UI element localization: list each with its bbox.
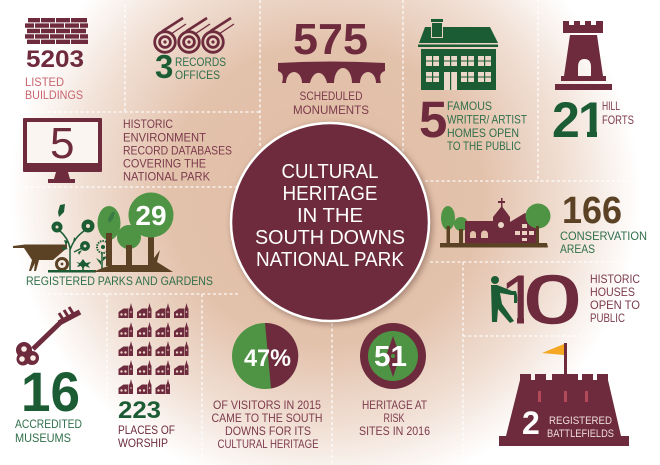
number: 16: 16: [21, 360, 80, 423]
label: historic houses: PUBLIC: [590, 311, 625, 325]
label: databases: ENVIRONMENT: [123, 130, 207, 144]
label: heritage at risk: RISK: [384, 411, 404, 425]
label: databases: COVERING THE: [123, 156, 206, 170]
icon: churches grid: [118, 303, 188, 394]
number: 10: 1: [500, 260, 539, 338]
label: homes: HOMES OPEN: [447, 126, 519, 140]
label: listed buildings: [25, 75, 83, 102]
label: visitors: [212, 398, 322, 451]
label: registered battlefields: BATTLEFIELDS: [547, 428, 614, 440]
number: 3: 3: [155, 48, 173, 85]
label: places of worship: PLACES OF: [118, 423, 175, 437]
label: places of worship: WORSHIP: [118, 436, 168, 450]
panel: records offices: [155, 18, 234, 85]
label: homes: WRITER/ ARTIST: [447, 112, 528, 126]
number: 21: 1: [578, 92, 606, 148]
label: conservation areas: CONSERVATION: [560, 229, 647, 243]
label: historic houses: OPEN TO: [590, 298, 640, 312]
icon: house: [418, 19, 498, 90]
label: historic houses: HISTORIC: [590, 272, 640, 286]
label: scheduled monuments: SCHEDULED: [300, 89, 363, 103]
label: places of worship: [118, 423, 175, 450]
title: IN THE: [297, 204, 363, 227]
label: scheduled monuments: MONUMENTS: [293, 103, 369, 117]
label: registered parks and gardens: REGISTERED PARKS AND GARDENS: [26, 274, 213, 288]
label: heritage at risk: [359, 398, 430, 438]
label: conservation areas: [560, 229, 647, 256]
icon: flowers: [48, 204, 109, 272]
label: listed buildings: LISTED: [25, 75, 64, 89]
number: 223: 223: [118, 397, 161, 424]
panel: record databases: [23, 117, 232, 184]
icon: village: [440, 198, 550, 248]
label: accredited museums: ACCREDITED: [15, 417, 82, 431]
number: 2: 2: [522, 405, 540, 441]
label: heritage at risk: HERITAGE AT: [362, 398, 428, 412]
panel: hill forts: [554, 21, 634, 137]
panel: visitors: [212, 323, 322, 451]
icon: man opening door: [491, 276, 517, 323]
icon: compass badge 51: 51: [374, 341, 407, 373]
title: [255, 160, 405, 271]
label: historic houses: HOUSES: [590, 285, 635, 299]
chart: 47 percent pie: 47%: [244, 345, 291, 372]
label: hill forts: HILL: [602, 99, 620, 113]
number: 166: 166: [562, 190, 622, 232]
number: 5203: 5203: [26, 46, 84, 73]
label: conservation areas: AREAS: [560, 242, 595, 256]
label: homes: FAMOUS: [447, 99, 492, 113]
title: SOUTH DOWNS: [255, 226, 405, 249]
number badge: 29: 29: [135, 200, 167, 231]
title: NATIONAL PARK: [256, 248, 404, 271]
panel: accredited museums: [15, 307, 82, 445]
label: visitors: DOWNS FOR ITS: [225, 424, 311, 438]
label: accredited museums: [15, 417, 82, 445]
label: scheduled monuments: [293, 89, 369, 117]
number: 5: 5: [419, 91, 447, 148]
panel: historic houses: [491, 274, 640, 324]
label: records offices: [175, 55, 226, 82]
title: CULTURAL: [282, 160, 378, 183]
icon: castle: [499, 343, 629, 446]
number: 10: [506, 274, 578, 324]
title: HERITAGE: [282, 182, 378, 205]
label: records offices: RECORDS: [175, 55, 226, 69]
label: databases: RECORD DATABASES: [123, 144, 232, 158]
label: homes: TO THE PUBLIC: [447, 139, 521, 153]
number badge: 29: [128, 192, 174, 238]
label: databases: [123, 117, 232, 184]
label: hill forts: FORTS: [602, 113, 634, 127]
panel: scheduled monuments: [278, 15, 385, 117]
icon: brick wall: [25, 18, 88, 44]
panel: registered battlefields: [499, 343, 629, 446]
icon: bridge: [278, 62, 385, 83]
icon: scrolls: [155, 18, 234, 52]
central title circle: [231, 123, 433, 325]
icon: key: [16, 307, 80, 366]
label: hill forts: [602, 99, 634, 127]
icon: wheelbarrow: [13, 244, 68, 271]
label: databases: NATIONAL PARK: [123, 170, 210, 184]
label: visitors: OF VISITORS IN 2015: [213, 398, 321, 412]
label: heritage at risk: SITES IN 2016: [359, 424, 430, 438]
icon: trees: [93, 206, 173, 272]
panel: registered parks and gardens: [13, 192, 213, 288]
label: registered battlefields: REGISTERED: [549, 415, 612, 427]
number: 575: 575: [293, 15, 368, 64]
panel: writer and artist homes: [418, 19, 528, 153]
panel: listed buildings: [25, 18, 88, 102]
panel: conservation areas: [440, 190, 647, 256]
panel: heritage at risk: [359, 323, 430, 438]
icon: tower: [555, 21, 612, 90]
label: historic houses: [590, 272, 640, 325]
number: 5: 5: [50, 119, 74, 168]
label: databases: HISTORIC: [123, 117, 173, 131]
label: visitors: CAME TO THE SOUTH: [212, 411, 322, 425]
label: registered battlefields: [547, 415, 614, 440]
number: 10: 0: [524, 262, 581, 338]
number: 21: 2: [552, 92, 580, 148]
label: accredited museums: MUSEUMS: [15, 431, 71, 445]
label: records offices: OFFICES: [175, 68, 220, 82]
icon: monitor: [23, 118, 102, 183]
label: homes: [447, 99, 528, 153]
panel: places of worship: [118, 303, 188, 450]
label: listed buildings: BUILDINGS: [25, 88, 83, 102]
label: visitors: CULTURAL HERITAGE: [218, 437, 318, 451]
